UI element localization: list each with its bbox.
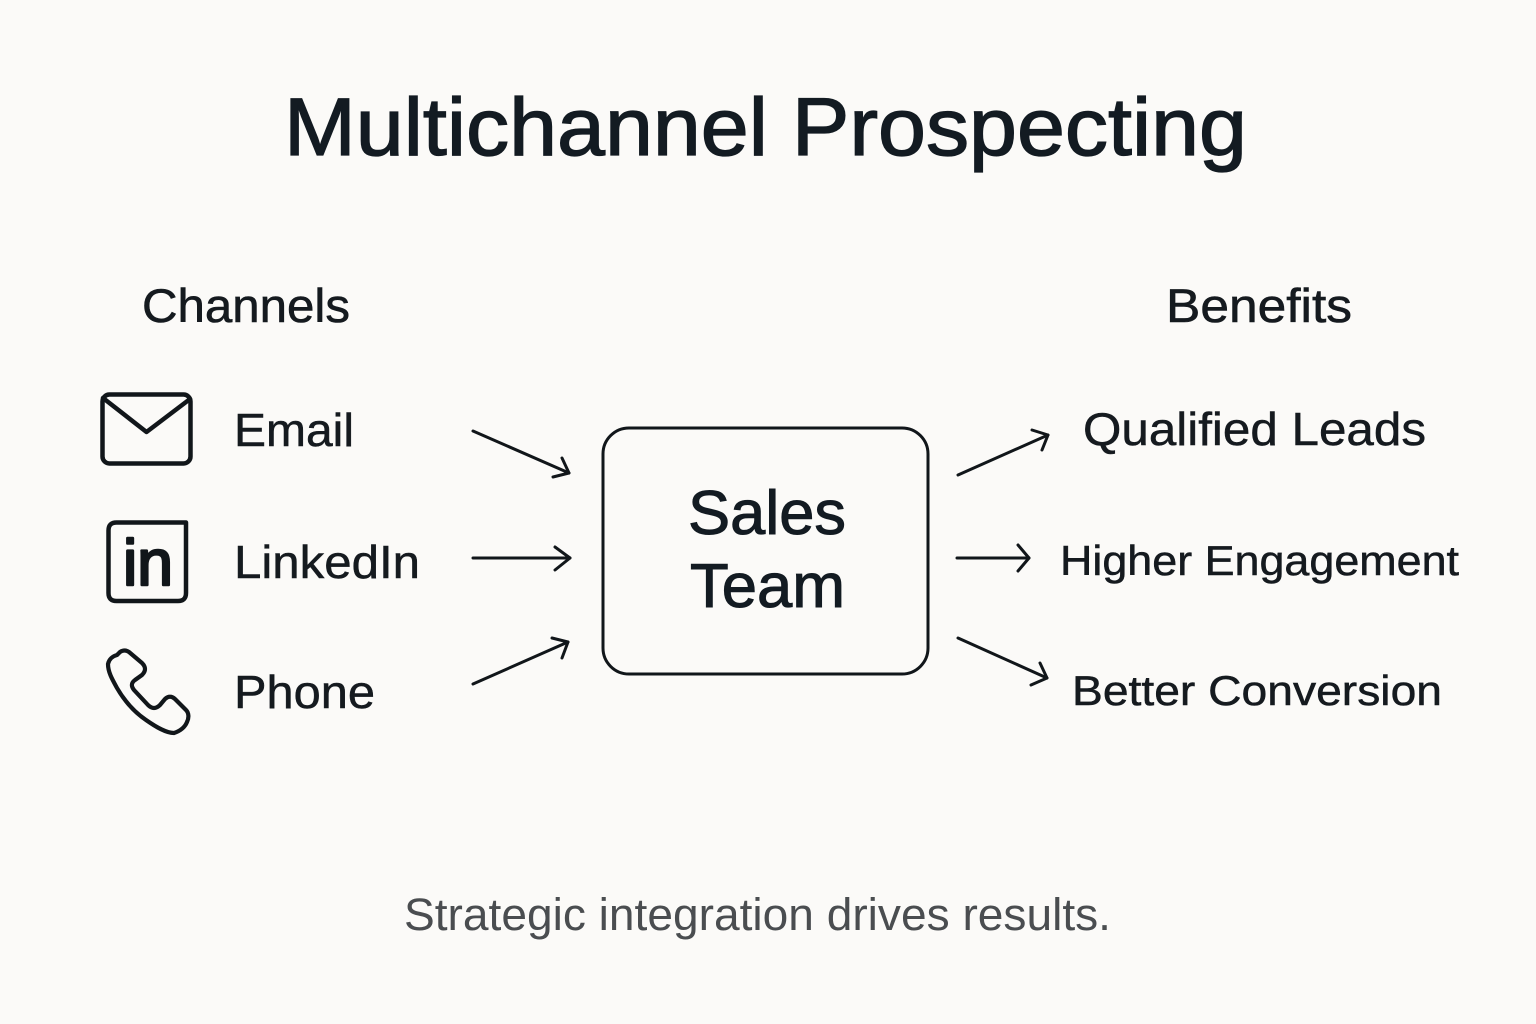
- arrow: to better conversion: [958, 638, 1047, 685]
- label: email: Email: [234, 404, 354, 456]
- icon: email: [102, 394, 190, 464]
- heading: channels: Channels: [142, 279, 350, 332]
- benefit: qualified leads: Qualified Leads: [1083, 403, 1426, 455]
- label: phone: Phone: [234, 666, 375, 718]
- icon: linkedin: [108, 522, 186, 601]
- benefit: higher engagement: Higher Engagement: [1060, 537, 1459, 584]
- icon: phone: [108, 650, 188, 733]
- arrow: phone to sales team: [473, 638, 568, 684]
- icon: linkedin: in: [123, 526, 173, 599]
- central box: sales team: Sales: [688, 479, 846, 548]
- label: linkedin: LinkedIn: [234, 536, 420, 588]
- central box: sales team: [603, 428, 928, 674]
- caption: Strategic integration drives results.: [404, 889, 1111, 940]
- heading: benefits: Benefits: [1166, 279, 1352, 332]
- arrow: to qualified leads: [958, 430, 1048, 475]
- arrow: linkedin to sales team: [473, 547, 570, 570]
- central box: sales team: Team: [690, 552, 845, 621]
- arrow: to higher engagement: [957, 545, 1029, 571]
- arrow: email to sales team: [473, 431, 569, 477]
- title: Multichannel Prospecting: [284, 82, 1247, 173]
- benefit: better conversion: Better Conversion: [1072, 667, 1442, 714]
